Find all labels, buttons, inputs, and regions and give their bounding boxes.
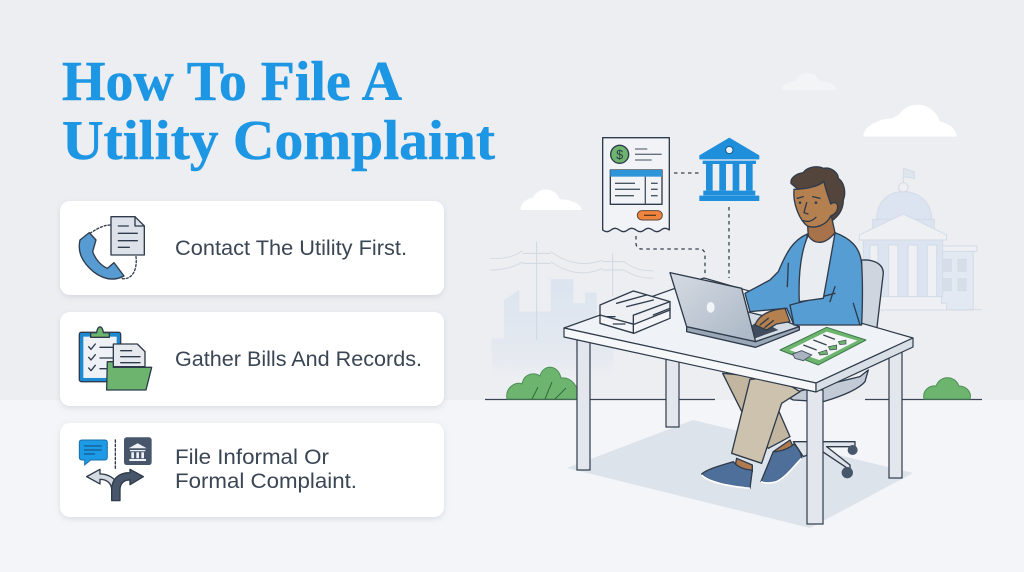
title: How To File A (62, 51, 403, 113)
background scene: clouds, power lines, skyline, capitol (490, 73, 982, 380)
step card: gather bills (60, 312, 444, 406)
step text: File Informal Or (175, 446, 329, 469)
neck (807, 217, 835, 242)
face (794, 182, 838, 227)
laptop screen (670, 273, 756, 342)
icon: government building (699, 138, 759, 201)
icon: chat, bank and forked arrows (79, 437, 152, 501)
icon: utility bill: $ (616, 148, 623, 162)
person upper body (670, 167, 862, 342)
horizon line (485, 398, 982, 400)
laptop base (687, 312, 799, 347)
icon: bushes (507, 367, 970, 399)
skyline (492, 279, 613, 380)
chair base and wheels (783, 370, 868, 478)
hand (755, 308, 790, 330)
title: Utility Complaint (62, 110, 495, 172)
floor (0, 400, 1024, 572)
hair back (791, 167, 845, 222)
step card: contact the utility (60, 201, 444, 295)
title (62, 51, 495, 172)
power lines (490, 242, 653, 340)
clipboard on desk (780, 327, 866, 365)
step text: Contact The Utility First. (175, 237, 407, 260)
desk legs (577, 340, 902, 524)
step text: Gather Bills And Records. (175, 348, 422, 371)
clouds (521, 73, 957, 210)
background wall (0, 0, 1024, 400)
office chair back (860, 260, 883, 330)
step text: Formal Complaint. (175, 470, 357, 493)
desk top (564, 278, 913, 383)
desk floor shadow (567, 420, 913, 528)
stack of documents (600, 291, 670, 333)
desk (564, 278, 913, 524)
step card: file complaint (60, 423, 444, 517)
person legs and shoes (702, 373, 802, 488)
dashed connectors (636, 173, 729, 278)
icon: utility bill (603, 138, 669, 232)
icon: phone and document (79, 217, 144, 279)
cardigan seams (787, 263, 860, 325)
icon: clipboard and folder (79, 327, 152, 390)
capitol building (859, 168, 977, 310)
cardigan (745, 233, 862, 325)
facial features (797, 197, 820, 221)
shirt (799, 233, 835, 302)
step text (175, 446, 357, 493)
